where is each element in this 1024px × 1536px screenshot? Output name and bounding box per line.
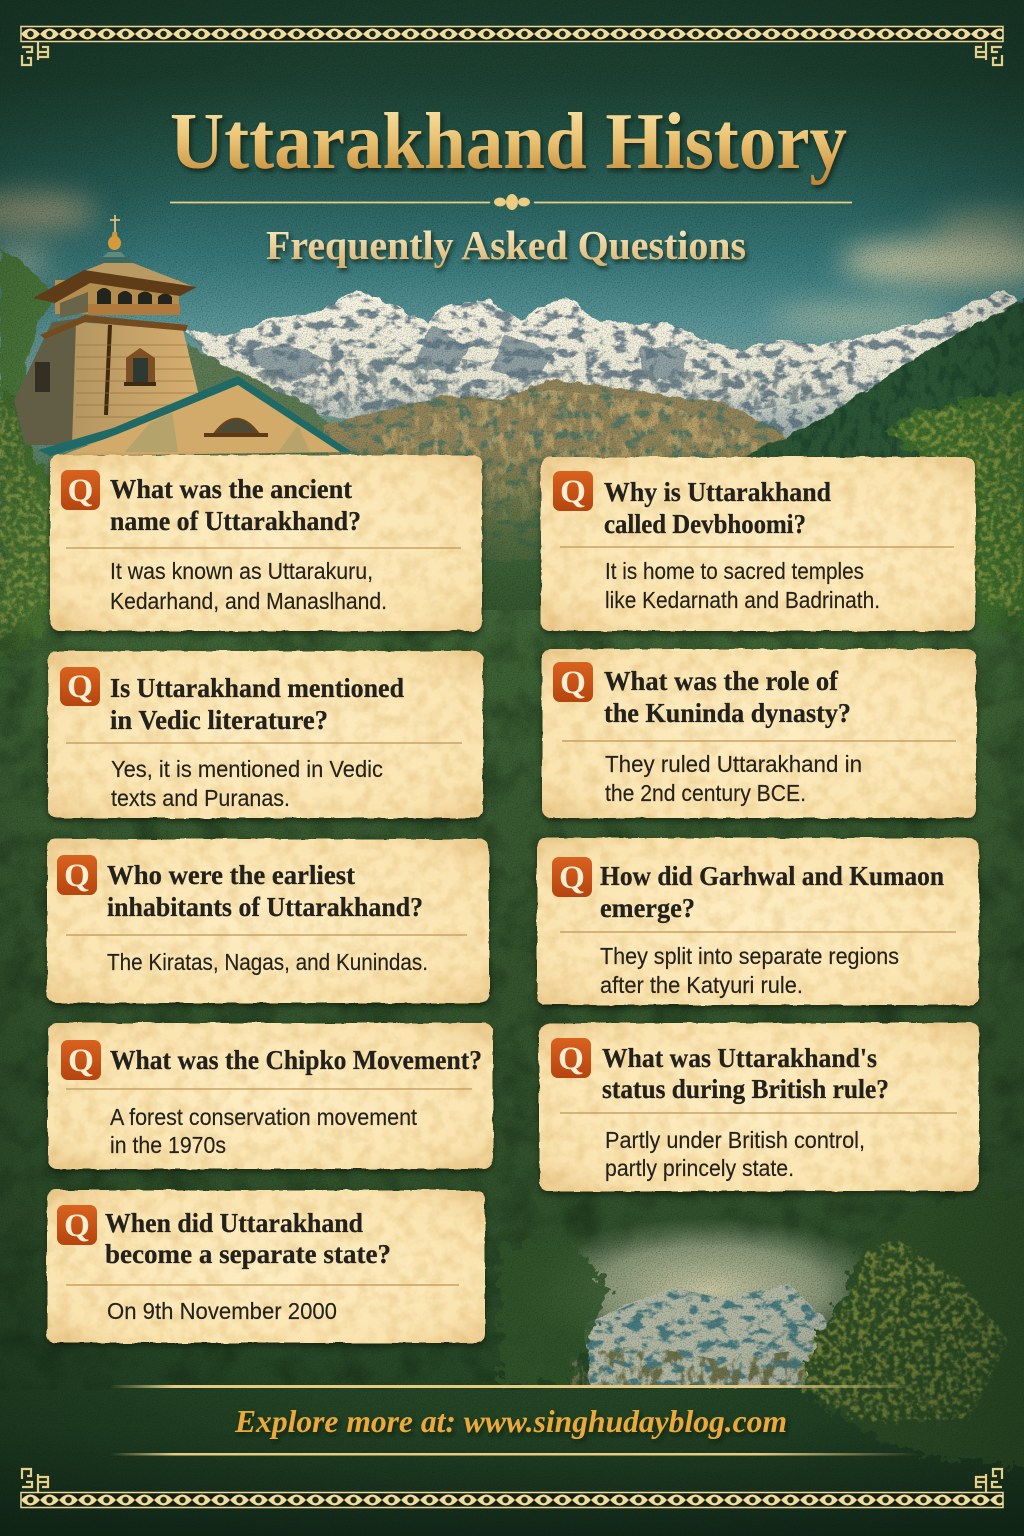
question: inhabitants of Uttarakhand? <box>107 891 423 922</box>
gable arch window <box>204 419 268 437</box>
answer: They split into separate regions <box>600 943 899 969</box>
answer <box>110 558 387 614</box>
answer: The Kiratas, Nagas, and Kunindas. <box>107 949 428 975</box>
parapet cornice <box>40 315 188 339</box>
answer: like Kedarnath and Badrinath. <box>605 587 880 613</box>
question: When did Uttarakhand <box>105 1207 363 1238</box>
card: Chipko Movement <box>48 1023 493 1169</box>
corner motif: bottom left <box>22 1469 48 1492</box>
tower stone wall <box>72 322 198 445</box>
question <box>105 1207 391 1269</box>
question: Why is Uttarakhand <box>604 476 831 507</box>
question <box>600 860 944 923</box>
Q icon <box>60 667 100 706</box>
Q icon: Q <box>558 1041 584 1077</box>
question: emerge? <box>600 892 695 923</box>
answer: On 9th November 2000 <box>107 1298 337 1324</box>
clouds <box>0 194 1024 326</box>
Q icon: Q <box>67 669 93 705</box>
question <box>604 476 831 539</box>
card: Devbhoomi <box>541 457 975 631</box>
lower trees <box>500 1195 1024 1470</box>
answer: after the Katyuri rule. <box>600 972 803 998</box>
question <box>604 665 851 728</box>
question: status during British rule? <box>602 1073 889 1104</box>
card: earliest inhabitants <box>47 839 489 1003</box>
spire <box>98 215 130 265</box>
question: What was the role of <box>604 665 839 696</box>
fade to green <box>0 440 1024 610</box>
card: Vedic literature <box>48 651 483 818</box>
answer: in the 1970s <box>110 1132 226 1158</box>
Q icon: Q <box>68 1043 94 1079</box>
temple illustration <box>14 215 352 456</box>
Q icon <box>552 857 592 897</box>
tree clusters: upper left and right <box>0 385 1024 660</box>
question <box>107 859 423 922</box>
answer <box>605 751 862 806</box>
Q icon: Q <box>560 474 586 510</box>
question: What was Uttarakhand's <box>602 1042 877 1073</box>
bottom ornamental border <box>21 1469 1003 1508</box>
question: become a separate state? <box>105 1238 391 1269</box>
answer: Yes, it is mentioned in Vedic <box>111 756 383 782</box>
tower window <box>124 348 156 386</box>
corner motif: bottom right <box>976 1469 1002 1492</box>
card: British rule <box>539 1023 979 1191</box>
title: Uttarakhand History <box>170 98 847 186</box>
Q icon <box>61 470 100 510</box>
answer: It is home to sacred temples <box>605 558 864 584</box>
gable wall <box>60 385 340 456</box>
Q icon <box>57 1205 97 1245</box>
top ornamental border <box>21 26 1003 65</box>
question: What was the Chipko Movement? <box>110 1044 482 1075</box>
Q icon: Q <box>64 1208 90 1244</box>
Q icon: Q <box>560 665 586 701</box>
question: called Devbhoomi? <box>604 508 806 539</box>
corner motif: top left <box>22 42 48 65</box>
question: in Vedic literature? <box>110 704 328 735</box>
gabled roof <box>38 376 352 456</box>
question: What was the ancient <box>110 473 353 504</box>
card: Garhwal and Kumaon <box>537 838 979 1005</box>
card: Kuninda dynasty <box>542 649 976 818</box>
answer: They ruled Uttarakhand in <box>605 751 862 777</box>
answer <box>605 558 880 613</box>
lower valley vista <box>520 1218 900 1386</box>
foothills behind temple <box>188 345 370 460</box>
tan foreground mountains <box>325 380 820 560</box>
midfield blotches <box>0 610 1024 1390</box>
card: separate state <box>47 1190 485 1343</box>
title divider with ornament <box>170 194 852 210</box>
question <box>602 1042 889 1104</box>
subtitle: Frequently Asked Questions <box>266 222 746 268</box>
answer: A forest conservation movement <box>110 1104 417 1130</box>
colonnade <box>55 280 180 318</box>
Q icon: Q <box>68 473 93 509</box>
Q icon <box>61 1040 101 1080</box>
question: name of Uttarakhand? <box>110 505 361 536</box>
upper roof <box>84 263 197 288</box>
website link text: Explore more at: www.singhudayblog.com <box>234 1403 787 1439</box>
Q icon <box>553 662 593 702</box>
answer <box>600 943 899 998</box>
Q icon <box>553 471 593 511</box>
question <box>110 473 361 536</box>
question <box>110 672 404 735</box>
Q icon <box>551 1038 591 1078</box>
question: How did Garhwal and Kumaon <box>600 860 944 891</box>
Q icon <box>57 855 97 895</box>
answer: partly princely state. <box>605 1155 794 1181</box>
left hill <box>0 248 55 470</box>
answer: Kedarhand, and Manaslhand. <box>110 588 387 614</box>
left dark window <box>35 362 50 392</box>
answer: Partly under British control, <box>605 1127 865 1153</box>
card: ancient name <box>50 455 482 631</box>
footer band <box>110 1385 920 1456</box>
tower dark left wall <box>14 318 82 445</box>
answer: the 2nd century BCE. <box>605 780 806 806</box>
question: the Kuninda dynasty? <box>604 697 851 728</box>
right forested hill <box>748 298 1024 560</box>
answer <box>111 756 383 811</box>
answer <box>605 1127 865 1181</box>
answer: It was known as Uttarakuru, <box>110 558 373 584</box>
answer <box>110 1104 417 1158</box>
question: Is Uttarakhand mentioned <box>110 672 404 703</box>
Q icon: Q <box>559 860 585 896</box>
question: Who were the earliest <box>107 859 356 890</box>
corner motif: top right <box>976 42 1002 65</box>
answer: texts and Puranas. <box>111 785 290 811</box>
Q icon: Q <box>64 858 90 894</box>
snow mountain range <box>186 292 1018 450</box>
